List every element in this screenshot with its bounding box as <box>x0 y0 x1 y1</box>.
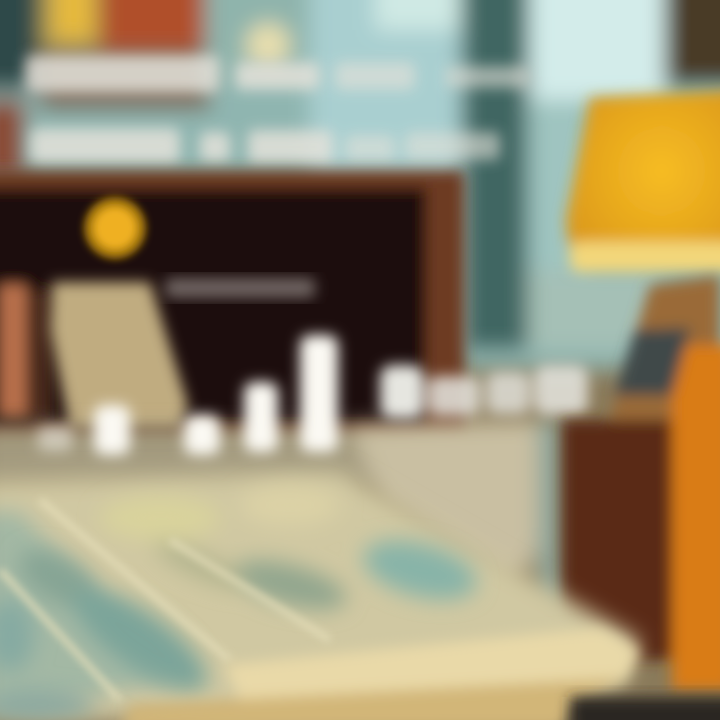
brown cabinet and orange panel <box>562 275 720 690</box>
subtitle text, blurred <box>165 278 315 298</box>
side labels, blurred <box>380 365 588 419</box>
background window and wall <box>0 0 720 370</box>
table front edge <box>120 628 640 720</box>
dark floor corner <box>570 697 720 720</box>
icon: yellow circle <box>84 197 146 259</box>
lamp <box>566 90 720 272</box>
paper sheet with table <box>0 470 640 720</box>
document card <box>50 282 188 430</box>
title text, blurred <box>25 55 530 164</box>
paper details <box>0 485 483 719</box>
bar chart, blurred white bars <box>38 335 338 455</box>
panel: table and cup <box>0 420 564 610</box>
panel: dark wooden board <box>0 170 465 440</box>
paper fold lines <box>0 500 330 700</box>
